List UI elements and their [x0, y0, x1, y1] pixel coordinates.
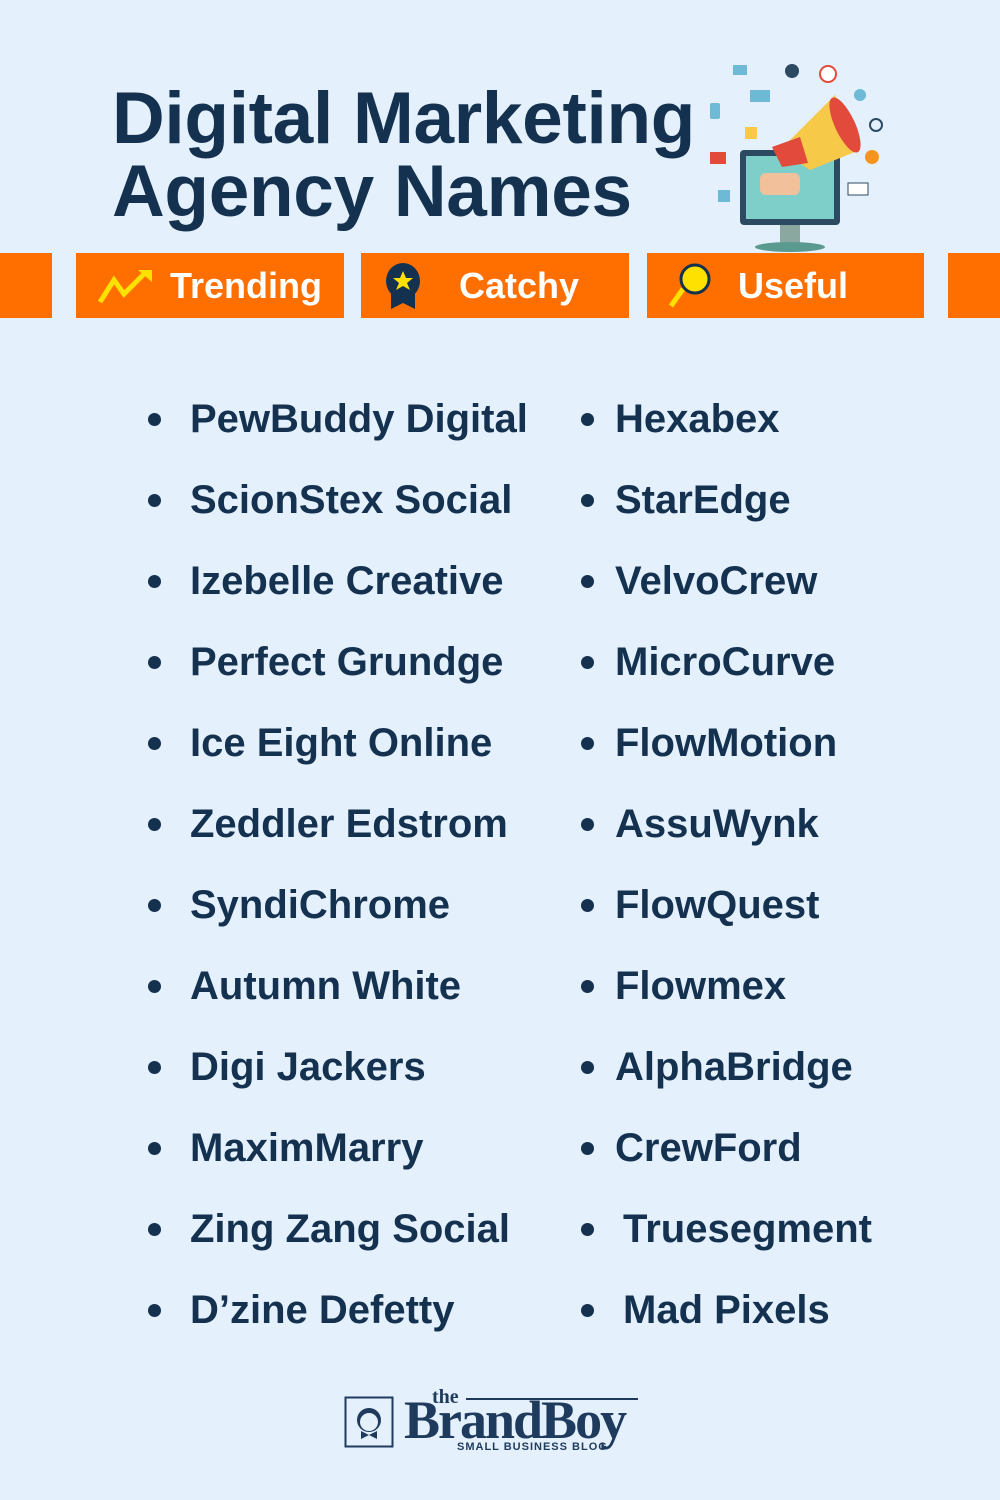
list: left column: Ice Eight Online	[190, 721, 492, 765]
list: left column: Zing Zang Social	[190, 1207, 510, 1251]
title	[112, 78, 695, 232]
list: right column	[581, 397, 872, 1332]
tab: Catchy	[361, 253, 629, 318]
list: right column: VelvoCrew	[615, 559, 817, 603]
tab: Catchy: Catchy	[459, 264, 579, 306]
logo: the BrandBoy: BrandBoy	[404, 1390, 625, 1450]
list: left column: Digi Jackers	[190, 1045, 426, 1089]
list: left column: PewBuddy Digital	[190, 397, 528, 441]
list: left column: MaximMarry	[190, 1126, 423, 1170]
tab: Useful: Useful	[738, 264, 848, 306]
list: left column: Perfect Grundge	[190, 640, 503, 684]
list: left column: Autumn White	[190, 964, 461, 1008]
list: right column: MicroCurve	[615, 640, 835, 684]
list: right column: AlphaBridge	[615, 1045, 853, 1089]
tab: right edge	[948, 253, 1000, 318]
list: right column: Flowmex	[615, 964, 786, 1008]
list: right column: FlowQuest	[615, 883, 819, 927]
logo: the BrandBoy: SMALL BUSINESS BLOG	[457, 1441, 608, 1453]
icon: logo face box	[344, 1396, 394, 1448]
list: right column: AssuWynk	[615, 802, 819, 846]
list: right column: Truesegment	[623, 1207, 872, 1251]
list: right column: StarEdge	[615, 478, 791, 522]
list: left column: Zeddler Edstrom	[190, 802, 508, 846]
tab: Trending: Trending	[170, 264, 322, 306]
list: left column: ScionStex Social	[190, 478, 512, 522]
logo: the BrandBoy: the	[432, 1386, 459, 1408]
list: left column: Izebelle Creative	[190, 559, 504, 603]
icon: badge star	[386, 263, 420, 309]
tab: Useful	[647, 253, 924, 318]
tab: Trending	[76, 253, 344, 318]
list: right column: FlowMotion	[615, 721, 837, 765]
list: left column: SyndiChrome	[190, 883, 450, 927]
list: right column: CrewFord	[615, 1126, 802, 1170]
title: Agency Names	[112, 151, 632, 232]
icon: trending arrow	[98, 270, 152, 304]
icon: megaphone illustration	[710, 64, 883, 252]
tab: left edge	[0, 253, 52, 318]
list: left column	[148, 397, 528, 1332]
logo: the BrandBoy	[344, 1386, 638, 1453]
list: right column: Mad Pixels	[623, 1288, 830, 1332]
title: Digital Marketing	[112, 78, 695, 159]
icon: magnifier	[669, 264, 710, 308]
list: left column: D’zine Defetty	[190, 1288, 454, 1332]
list: right column: Hexabex	[615, 397, 780, 441]
